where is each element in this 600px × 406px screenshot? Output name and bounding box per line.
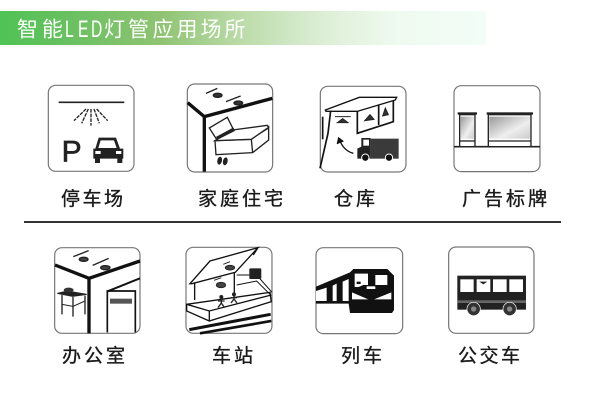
label: parking: 停车场: [61, 188, 123, 210]
label: station: 车站: [212, 345, 253, 367]
label: home: 家庭住宅: [198, 188, 283, 210]
icon: small sign: [458, 112, 477, 147]
label: bus: 公交车: [458, 345, 520, 367]
icon: large sign: [487, 112, 533, 147]
icon: car: [93, 138, 123, 163]
icon: slippers: [217, 156, 228, 166]
icon: distant train: [249, 268, 261, 279]
title: LED: [65, 17, 102, 43]
icon: bus: [457, 276, 526, 316]
icon: arrow: [337, 138, 353, 153]
title: 智能: [17, 18, 63, 42]
icon: desk: [57, 288, 87, 317]
title banner: [0, 11, 486, 45]
icon: train: [316, 269, 394, 313]
panel: office: [55, 248, 140, 333]
panel: station: [186, 247, 272, 333]
icon: door sign: [110, 299, 132, 304]
label: warehouse: 仓库: [334, 188, 375, 210]
divider: [24, 221, 561, 223]
label: billboard: 广告标牌: [462, 188, 547, 210]
icon: warehouse lights: [335, 108, 388, 123]
panel: warehouse: [320, 86, 406, 172]
title: [17, 17, 246, 43]
icon: people: [218, 293, 237, 308]
panel: parking: [48, 85, 134, 171]
icon: letter P: P: [62, 135, 82, 168]
panel: home: [187, 84, 273, 172]
label: train: 列车: [341, 345, 382, 367]
icon: bed: [209, 117, 269, 155]
icon: station lights: [214, 262, 235, 288]
panel: train: [316, 248, 403, 334]
panel: bus: [449, 247, 534, 333]
title: 灯管应用场所: [104, 18, 246, 42]
panel: billboard: [454, 86, 540, 172]
label: office: 办公室: [62, 345, 125, 367]
icon: office lights: [73, 251, 110, 270]
icon: ceiling lights: [206, 88, 243, 105]
icon: light rays: [74, 109, 108, 126]
icon: truck: [357, 138, 399, 161]
